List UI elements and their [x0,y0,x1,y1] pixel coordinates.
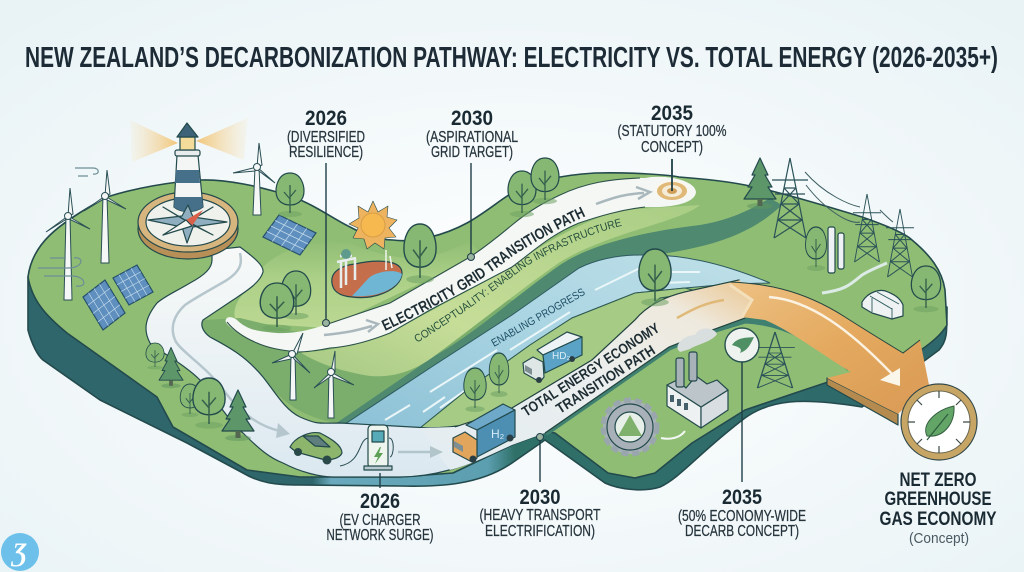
conceptuality text: CONCEPTUALITY: ENABLING INFRASTRUCTURE [414,218,622,342]
turbine 3 [233,143,275,215]
turbine 2 [84,170,126,263]
wind turbines [46,143,354,418]
river [345,255,770,428]
total path line 2 [560,353,656,414]
H2 truck: H₂ [491,427,505,441]
lighthouse beams [130,118,248,162]
turbine 4 [272,333,310,400]
enabling progress text: ENABLING PROGRESS [491,288,585,347]
callout 2030 grid: GRID TARGET) [431,144,513,161]
compass star [148,205,227,243]
island side wall [28,277,947,490]
turbine 1 [46,188,90,300]
HD2 truck: HD₂ [552,351,570,362]
pine trees [159,158,776,441]
gear icon [603,400,657,454]
factory flow arrow [661,431,685,439]
callout 2035 economy [678,362,806,540]
island meadow [420,288,700,428]
total path streak [677,300,724,318]
callout 2026 grid: 2026 [305,107,347,130]
callout 2030 economy: 2030 [520,486,560,509]
chevron [730,285,752,317]
callout 2026 grid [287,107,365,326]
smoke stacks [828,227,844,273]
callout 2030 grid [426,107,518,260]
stream [822,263,887,293]
electricity path text: ELECTRICITY GRID TRANSITION PATH [381,206,586,331]
callout 2035 grid: (STATUTORY 100% [618,123,727,140]
lighthouse [174,123,203,212]
total path line 1 [526,331,660,417]
callout 2035 economy: DECARB CONCEPT) [685,523,799,540]
net zero label: (Concept) [909,531,969,547]
net zero clock [901,384,977,460]
callout 2026 grid: (DIVERSIFIED [287,129,365,146]
callout 2030 grid: (ASPIRATIONAL [426,129,518,146]
callout 2035 grid: 2035 [651,102,693,125]
infrastructure path [417,226,621,343]
electricity grid path band [226,177,696,352]
grid band edges [227,178,645,352]
road centre arrow [173,253,280,431]
island top surface [28,173,947,478]
geothermal pond [332,249,402,298]
panel left 1 [83,280,125,330]
total energy path band [420,280,760,470]
light band under grid path [300,205,700,376]
callout 2026 economy: NETWORK SURGE) [326,527,434,544]
wind swirl marks [38,168,98,286]
bullseye 2035 grid [655,180,689,200]
EV charger [340,425,393,470]
electricity path label [385,214,590,331]
callout 2026 economy: (EV CHARGER [340,512,420,529]
callout 2035 economy: 2035 [722,486,762,509]
panel right of lighthouse [263,215,316,255]
callout 2035 grid: CONCEPT) [641,139,703,156]
lower right meadow edge [545,320,850,433]
net zero label: GAS ECONOMY [880,509,997,530]
net zero label [880,470,997,547]
round trees [146,158,941,429]
sun [349,201,397,249]
net zero label: NET ZERO [900,470,976,491]
callout 2035 economy: (50% ECONOMY-WIDE [678,508,806,525]
arrow highlight [769,297,893,375]
net zero label: GREENHOUSE [884,489,992,510]
light meadow patch [234,240,480,328]
power lines [805,172,893,222]
white road [146,247,745,477]
turbine valley lobe [202,300,520,423]
lower damaged pylon [755,332,795,388]
callout 2026 economy: 2026 [360,490,400,513]
panel left 2 [113,265,153,305]
economy circle icon [725,328,759,362]
callout 2030 grid: 2030 [451,107,493,130]
solar panels [83,215,316,330]
grid path arrow start [324,320,378,335]
compass ring [138,192,238,259]
HD2 truck [523,332,582,383]
callout 2030 economy: (HEAVY TRANSPORT [480,507,601,524]
orange net zero arrow [729,282,929,425]
callout 2026 grid: RESILIENCE) [289,144,363,161]
power pylons [755,158,914,388]
callout 2035 grid [618,102,727,191]
factory [667,328,728,428]
river streaks [385,268,700,420]
transition path text: TRANSITION PATH [554,344,656,412]
progress path [494,294,586,347]
logo badge [1,533,39,571]
callout 2030 economy [480,434,601,540]
turbine 5 [314,351,354,418]
landscape island [28,173,947,490]
logo badge: Ʒ [10,538,27,567]
total energy text: TOTAL ENERGY ECONOMY [520,322,658,416]
callout 2026 economy [326,473,434,544]
greenhouse [862,290,903,319]
road arrow to truck [398,446,443,458]
grid path arrow end [596,187,650,204]
dark green riverbank [335,198,782,425]
H2 truck [453,404,515,462]
road arrowhead [276,423,290,438]
callout 2030 economy: ELECTRIFICATION) [485,523,595,540]
electric car [290,433,342,464]
